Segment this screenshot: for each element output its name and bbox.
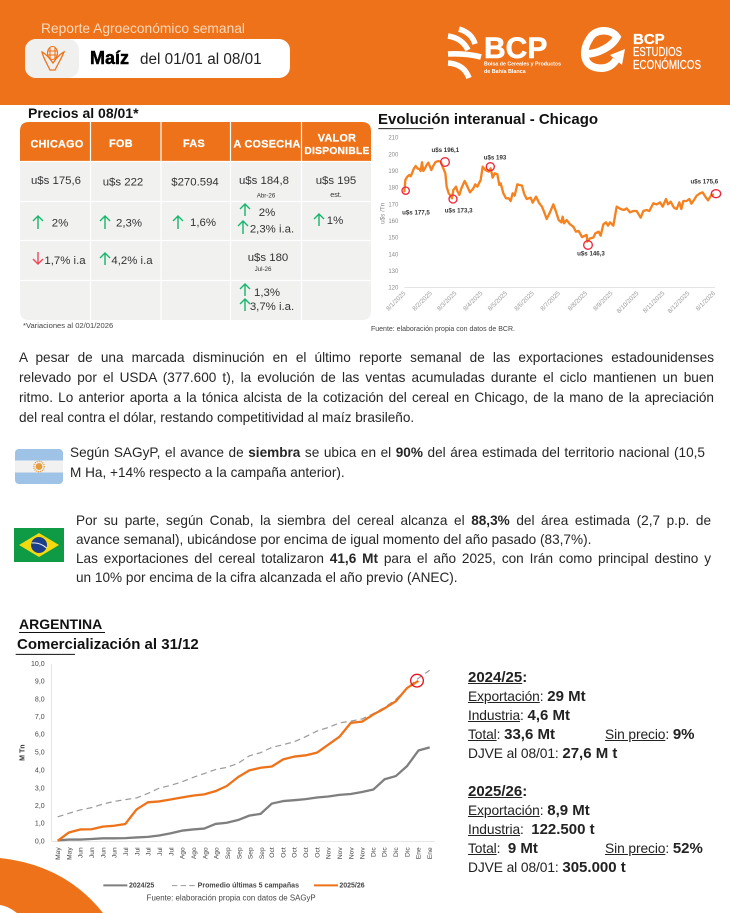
stats: campaign 2025/26: Sin precio: 52% [605, 840, 703, 857]
x axis: Dic [393, 847, 400, 857]
line chart: Chicago: 8/3/2025 [436, 290, 459, 313]
highlight circle [411, 674, 423, 687]
line chart: commercialization [16, 654, 435, 902]
line chart: Chicago: 8/10/2025 [616, 290, 641, 315]
table values: 2% [52, 218, 68, 230]
main paragraph: A pesar de una marcada disminución en el último reporte semanal de las exportaciones estadounidenses [19, 350, 714, 365]
stats: campaign 2024/25: Sin precio: 9% [605, 726, 695, 743]
text: Argentina sowing: Según SAGyP, el avance de siembra se ubica en el 90% del área estimada del territorio nacional (10,5 [70, 445, 705, 460]
data labels: u$s 146,3 [577, 250, 605, 257]
main paragraph [19, 350, 714, 425]
text: Brazil [76, 513, 711, 585]
line chart: Chicago: 8/4/2025 [462, 290, 485, 313]
y axis: 3,0 [35, 785, 45, 792]
table headers: FAS [183, 138, 205, 150]
line chart: Chicago: 8/8/2025 [567, 290, 589, 313]
logo: BCP: de Bahía Blanca [484, 69, 527, 75]
axis labels: 140 [388, 252, 399, 258]
stats: campaign 2024/25: Exportación: 29 Mt [468, 688, 586, 705]
x axis: May [66, 847, 73, 860]
table values: 1% [327, 215, 343, 227]
table values: 4,2% i.a [111, 255, 153, 267]
stats: campaign 2024/25: Industria: 4,6 Mt [468, 707, 570, 724]
table values: $270.594 [171, 176, 219, 188]
logo: BCP Estudios Económicos: ECONÓMICOS [633, 57, 701, 72]
x axis: Oct [314, 847, 321, 858]
x axis: Ene [416, 847, 423, 859]
series: 2024/25 [58, 747, 430, 840]
main paragraph: ritmo. Lo anterior aporta a la tónica alcista de la cotización del cereal en Chicago, de la mano de la apreciación [19, 390, 714, 405]
axis labels: 180 [388, 186, 399, 192]
line chart: Chicago: 8/9/2025 [592, 290, 615, 313]
price line [404, 161, 714, 242]
x axis: Sep [259, 847, 266, 859]
stats: campaign 2024/25: Total: 33,6 Mt [468, 726, 555, 743]
axis labels: 210 [388, 136, 399, 142]
x axis: Jul [123, 847, 130, 856]
header band [0, 0, 730, 105]
x axis: Ago [191, 847, 198, 859]
x axis: Jul [168, 847, 175, 856]
table values: u$s 195 [316, 175, 356, 187]
flag: Argentina [15, 449, 63, 484]
logo: BCP [448, 26, 561, 79]
table values: 2,3% i.a. [250, 224, 294, 236]
table values: 1,7% i.a [44, 255, 86, 267]
x axis [55, 847, 434, 860]
x axis: Sep [236, 847, 243, 859]
line chart: Chicago: 8/1/2025 [385, 290, 408, 313]
table values: 1,3% [254, 287, 280, 299]
table values: 2% [259, 207, 275, 219]
x axis: Oct [280, 847, 287, 858]
y axis [31, 661, 45, 846]
line chart: Chicago [378, 128, 722, 315]
y axis: 0,0 [35, 839, 45, 846]
x axis: Sep [248, 847, 255, 859]
legend: Promedio últimas 5 campañas [198, 883, 299, 890]
y axis: 9,0 [35, 679, 45, 686]
text: Brazil: avance semanal), ubicándose por encima de igual momento del año pasado (83,7%). [76, 532, 591, 547]
y axis: 1,0 [35, 821, 45, 828]
stats: campaign 2024/25 [468, 669, 695, 762]
line chart: Chicago: 8/1/2026 [695, 290, 717, 313]
main paragraph: del real contra el dólar, restando competitividad al maíz brasileño. [19, 410, 414, 425]
logo: BCP: Bolsa de Cereales y Productos [484, 62, 561, 68]
data labels: u$s 177,5 [402, 210, 430, 217]
x axis: Nov [337, 847, 344, 859]
price table [20, 122, 371, 320]
x axis: Jun [89, 847, 96, 858]
table values: u$s 180 [248, 252, 288, 264]
main paragraph: relevado por el USDA (377.600 t), la evolución de las ventas acumuladas durante el ciclo mantienen un buen [19, 370, 714, 385]
date range: del 01/01 al 08/01 [140, 50, 262, 68]
heading: Argentina: ARGENTINA [19, 616, 102, 632]
flag: Brazil [14, 528, 64, 562]
icon box: corn [25, 39, 79, 78]
axis labels: 130 [388, 269, 399, 275]
x axis: Dic [382, 847, 389, 857]
axis labels [388, 136, 399, 291]
legend: 2024/25 [129, 883, 154, 890]
y axis: 7,0 [35, 714, 45, 721]
x axis: Oct [292, 847, 299, 858]
table headers: A COSECHA [233, 138, 301, 150]
text: Brazil: Las exportaciones del cereal totalizaron 41,6 Mt para el año 2025, con Irán como principal destino y [76, 551, 711, 566]
commodity pill [25, 39, 290, 78]
axis labels: 150 [388, 236, 399, 242]
logo: BCP Estudios Económicos: ESTUDIOS [633, 45, 682, 59]
table values: u$s 222 [103, 176, 143, 188]
x axis: Ago [180, 847, 187, 859]
heading: prices: Precios al 08/01* [28, 105, 139, 121]
data labels: u$s 173,3 [445, 207, 473, 214]
table values: est. [330, 190, 342, 199]
stats: campaign 2025/26: DJVE al 08/01: 305.000 t [468, 859, 626, 876]
table headers: CHICAGO [30, 138, 84, 150]
table values: 3,7% i.a. [250, 301, 294, 313]
data labels: u$s 175,6 [690, 178, 719, 185]
x axis: Ene [427, 847, 434, 859]
axis labels: 120 [388, 285, 399, 291]
x axis: Ago [202, 847, 209, 859]
stats: campaign 2025/26: 2025/26: [468, 783, 527, 800]
data labels: u$s 196,1 [431, 147, 460, 154]
table values: Abr-26 [257, 192, 276, 200]
table values: 1,6% [190, 217, 216, 229]
chart source: BCR: Fuente: elaboración propia con datos de BCR. [371, 326, 515, 333]
x axis: Oct [269, 847, 276, 858]
series: 2025/26 [58, 681, 418, 841]
line chart: Chicago: 8/5/2025 [487, 290, 509, 313]
text: Argentina sowing [70, 445, 705, 480]
y axis: 6,0 [35, 732, 45, 739]
x axis: Jun [112, 847, 119, 858]
text: Brazil: Por su parte, según Conab, la siembra del cereal alcanza el 88,3% del área estimada (2,7 p.p. de [76, 513, 711, 528]
data labels [402, 147, 719, 257]
stats: campaign 2024/25: DJVE al 08/01: 27,6 M t [468, 745, 617, 762]
table headers: FOB [109, 138, 133, 150]
x axis: Sep [225, 847, 232, 859]
stats: campaign 2025/26: Industria: 122.500 t [468, 821, 595, 838]
line chart: Chicago: 8/12/2025 [667, 290, 692, 315]
legend: 2025/26 [339, 883, 365, 890]
highlight circles [402, 158, 721, 249]
data labels: u$s 193 [484, 155, 507, 162]
x axis: Nov [360, 847, 367, 859]
logo: BCP Estudios Económicos: BCP [633, 31, 665, 48]
table headers [30, 132, 370, 157]
line chart: commercialization: M Tn [20, 745, 27, 761]
line chart: Chicago: u$s /Tn [380, 202, 387, 224]
stats: campaign 2025/26: Exportación: 8,9 Mt [468, 802, 590, 819]
text: Brazil: un 10% por encima de la cifra alcanzada el año previo (ANEC). [76, 570, 458, 585]
chart source: SAGyP: Fuente: elaboración propia con datos de SAGyP [147, 893, 316, 902]
x axis: Jul [157, 847, 164, 856]
stats: campaign 2025/26: Total: 9 Mt [468, 840, 538, 857]
x axis: Jul [146, 847, 153, 856]
x axis: Jun [78, 847, 85, 858]
x axis: Nov [348, 847, 355, 859]
table footnote: *Variaciones al 02/01/2026 [23, 321, 113, 330]
report title: Reporte Agroeconómico semanal [41, 21, 245, 36]
y axis: 10,0 [31, 661, 45, 668]
table headers: VALOR [318, 132, 356, 144]
axis labels: 170 [388, 202, 399, 208]
stats: campaign 2025/26 [468, 783, 703, 876]
heading: Chicago evolution: Evolución interanual - Chicago [378, 111, 598, 128]
y axis: 2,0 [35, 803, 45, 810]
axis labels: 190 [388, 169, 399, 175]
axis labels: 160 [388, 219, 399, 225]
text: Argentina sowing: M Ha, +14% respecto a la campaña anterior). [70, 465, 345, 480]
axis labels: 200 [388, 152, 399, 158]
line chart: Chicago: 8/2/2025 [411, 290, 434, 313]
x axis: Dic [404, 847, 411, 857]
logo: BCP Estudios Económicos [580, 27, 701, 72]
table values: u$s 184,8 [239, 175, 289, 187]
x axis: Dic [370, 847, 377, 857]
series lines [58, 670, 430, 841]
x axis: Nov [326, 847, 333, 859]
y axis: 8,0 [35, 696, 45, 703]
table values: 2,3% [116, 218, 142, 230]
commodity name: Maíz [90, 48, 129, 68]
stats: campaign 2024/25: 2024/25: [468, 669, 527, 686]
variation arrows [33, 204, 324, 311]
y axis: 5,0 [35, 750, 45, 757]
decoration: orange corner [0, 858, 103, 913]
table headers: DISPONIBLE [304, 146, 370, 157]
x axis: Oct [303, 847, 310, 858]
y axis: 4,0 [35, 767, 45, 774]
table values: u$s 175,6 [31, 175, 81, 187]
heading: commercialization: Comercialización al 31/12 [17, 636, 199, 653]
table values: Jul-26 [255, 266, 272, 273]
x axis: Jun [100, 847, 107, 858]
line chart: Chicago: 8/7/2025 [539, 290, 562, 313]
line chart: Chicago: 8/6/2025 [513, 290, 536, 313]
series: average of last 5 campaigns [58, 670, 430, 817]
legend [103, 883, 365, 890]
line chart: Chicago: 8/11/2025 [642, 290, 667, 315]
logo: BCP: BCP [484, 32, 547, 65]
table values [31, 175, 356, 313]
x axis: Ago [214, 847, 221, 859]
x axis: Jul [134, 847, 141, 856]
x axis: May [55, 847, 62, 860]
